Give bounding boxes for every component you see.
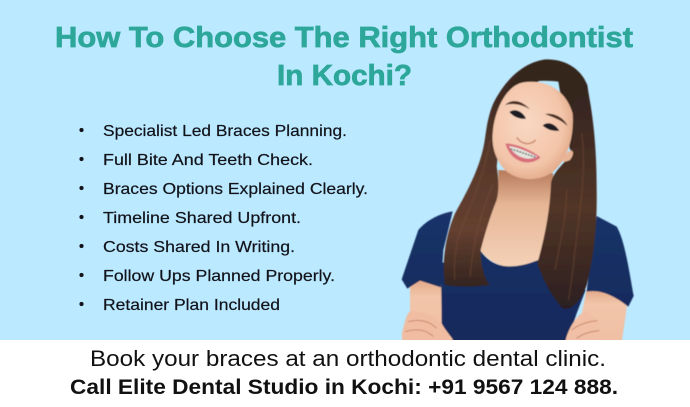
ear	[562, 151, 573, 162]
item 4: Timeline Shared Upfront.	[103, 210, 301, 227]
nose	[517, 137, 536, 144]
title: How To Choose The Right Orthodontist	[55, 22, 633, 54]
hair left	[444, 59, 557, 287]
eye right	[543, 123, 559, 131]
hair strands	[454, 133, 583, 300]
footer line 2: Call Elite Dental Studio in Kochi: +91 9567 124 888.	[70, 376, 618, 399]
item 1: Specialist Led Braces Planning.	[103, 123, 347, 140]
left hand	[402, 311, 453, 343]
right fingers	[572, 321, 599, 338]
title	[55, 22, 633, 92]
item 5: Costs Shared In Writing.	[103, 239, 295, 256]
checklist	[80, 123, 368, 314]
eye left	[509, 110, 526, 119]
left fingers	[405, 320, 437, 337]
photo: smiling woman with braces	[402, 59, 634, 343]
footer band	[0, 340, 690, 407]
neck and chest	[480, 170, 553, 268]
shirt	[402, 211, 634, 343]
item 6: Follow Ups Planned Properly.	[103, 268, 335, 285]
face	[492, 82, 573, 179]
item 2: Full Bite And Teeth Check.	[103, 152, 313, 169]
teeth and braces	[509, 146, 537, 159]
item 3: Braces Options Explained Clearly.	[103, 181, 368, 198]
mouth	[505, 143, 541, 162]
right arm	[563, 287, 627, 343]
footer line 1: Book your braces at an orthodontic dental clinic.	[90, 346, 606, 371]
left arm	[409, 280, 452, 340]
right hand	[564, 313, 582, 340]
title: In Kochi?	[277, 60, 412, 92]
eyebrow right	[545, 114, 568, 126]
hair right	[537, 85, 597, 309]
hair top	[511, 58, 590, 150]
item 7: Retainer Plan Included	[103, 297, 280, 314]
eyebrow left	[505, 101, 530, 109]
